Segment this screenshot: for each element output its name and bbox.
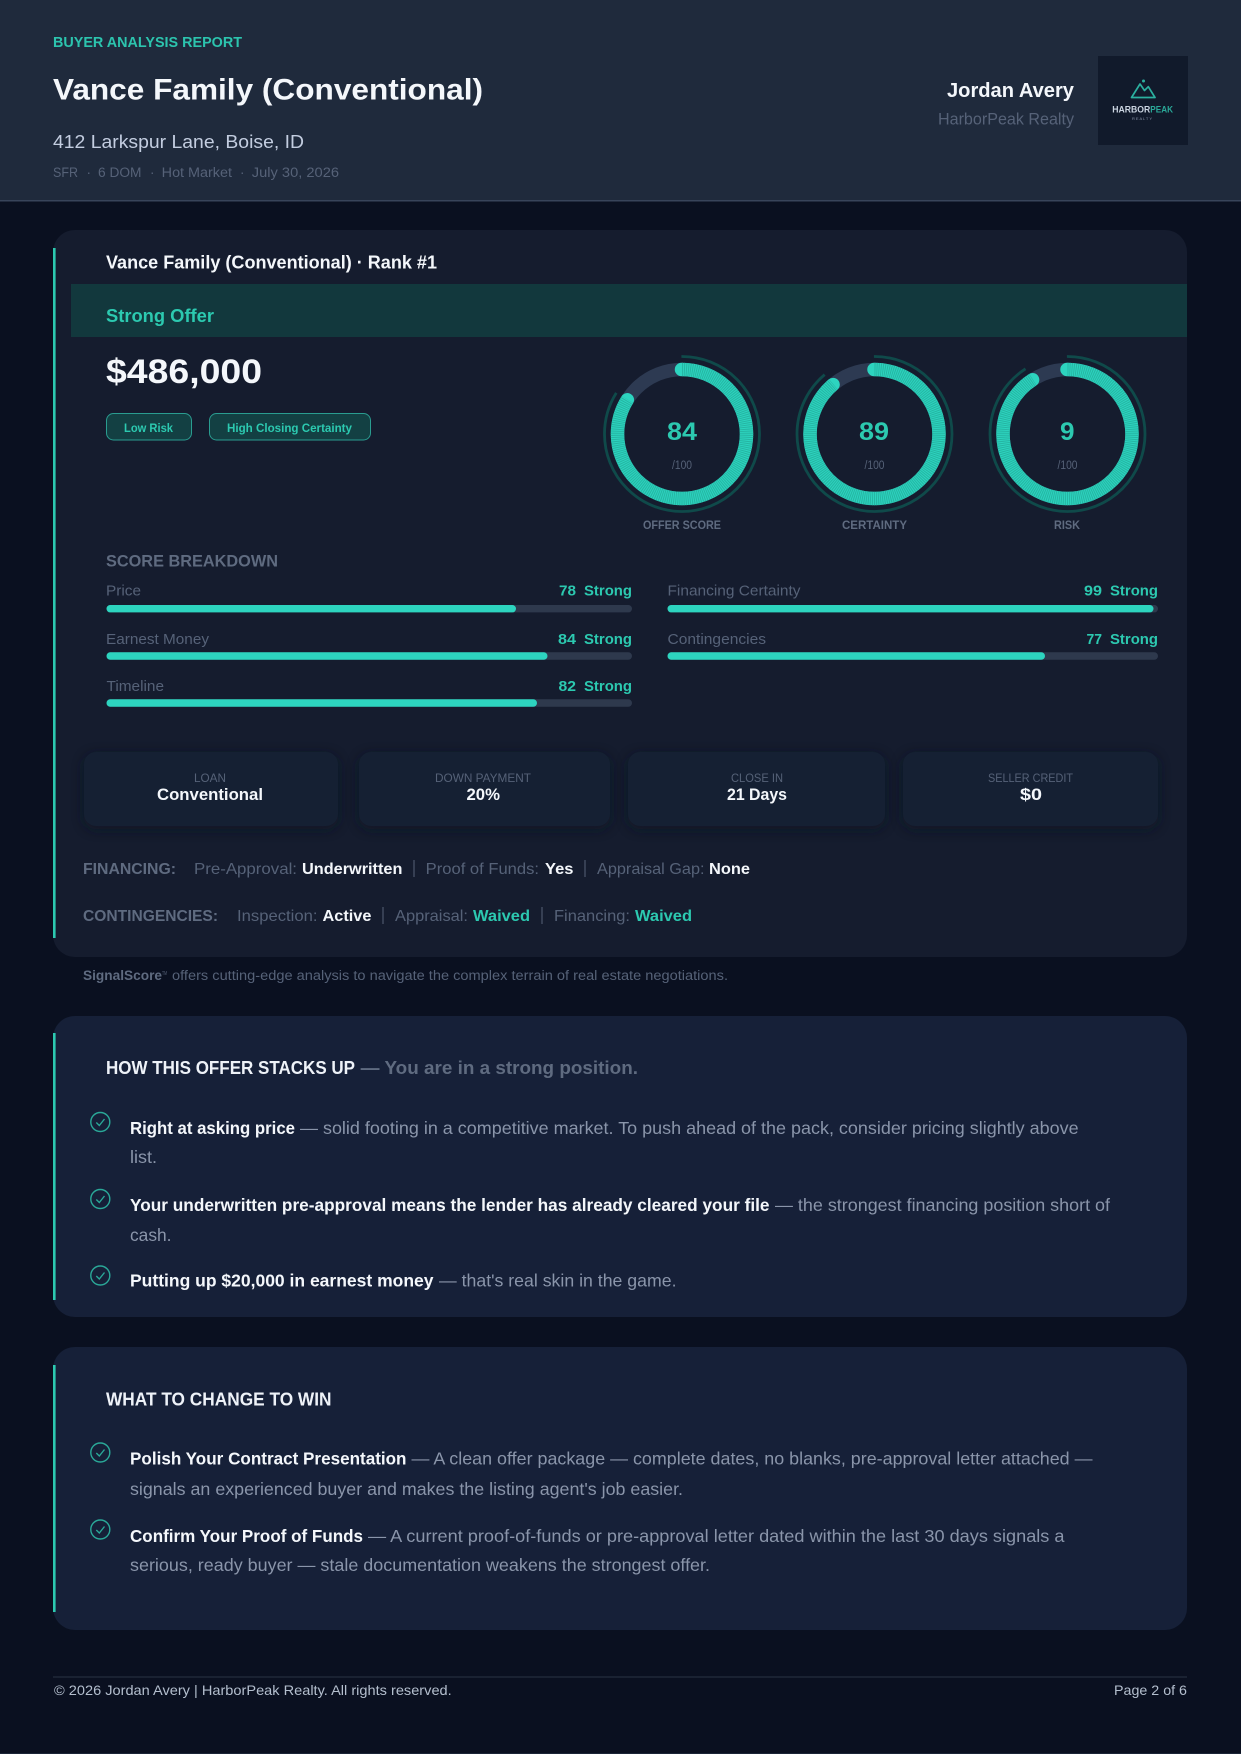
icon: check: [91, 1266, 110, 1285]
point: earnest money: [130, 1270, 676, 1290]
score bar: financing certainty: [668, 584, 1158, 612]
financing line: [83, 860, 750, 878]
recommendation: contract presentation: — A clean offer package — complete dates, no blanks, pre-approval letter attached —: [412, 1448, 1093, 1468]
brokerage name: HarborPeak Realty: [938, 110, 1075, 128]
icon: check: [91, 1443, 110, 1462]
recommendation: contract presentation: Polish Your Contract Presentation: [130, 1448, 406, 1468]
financing line: FINANCING:: [83, 861, 176, 878]
contingencies line: Waived: [473, 908, 530, 925]
point: asking price: Right at asking price: [130, 1118, 295, 1138]
section heading: [106, 1058, 638, 1078]
property meta: [53, 165, 339, 180]
score bar: earnest money: Strong: [584, 632, 632, 648]
stat tile: close in: [628, 752, 885, 829]
section heading: WHAT TO CHANGE TO WIN: [106, 1390, 332, 1410]
contingencies line: Financing:: [554, 908, 630, 925]
score bar: price: Price: [106, 584, 141, 600]
property meta: July 30, 2026: [252, 165, 339, 180]
score bar: timeline: Strong: [584, 679, 632, 695]
badge: high closing certainty: High Closing Certainty: [227, 423, 353, 435]
financing line: Appraisal Gap:: [597, 861, 704, 878]
panel: what to change to win: [53, 1347, 1187, 1630]
financing line: Underwritten: [302, 861, 402, 878]
accent bar: [53, 248, 56, 938]
section heading: — You are in a strong position.: [361, 1058, 638, 1078]
status band: strong offer: Strong Offer: [106, 306, 214, 326]
point: earnest money: Putting up $20,000 in earnest money: [130, 1270, 434, 1290]
stat tile: seller credit: SELLER CREDIT: [988, 771, 1074, 785]
score bar: earnest money: [106, 632, 632, 660]
score bar: timeline: Timeline: [106, 679, 164, 695]
property meta: ·: [150, 165, 154, 180]
point: underwritten pre-approval: [130, 1195, 1110, 1245]
SignalScore disclaimer: TM: [162, 971, 167, 977]
section heading: HOW THIS OFFER STACKS UP: [106, 1058, 355, 1078]
gauge: certainty: /100: [864, 460, 884, 472]
gauge: certainty: CERTAINTY: [842, 520, 907, 532]
score bar: earnest money: 84: [558, 632, 576, 648]
point: underwritten pre-approval: — the strongest financing position short of: [775, 1195, 1110, 1215]
header: [0, 0, 1241, 202]
page number: Page 2 of 6: [1114, 1682, 1187, 1698]
copyright: © 2026 Jordan Avery | HarborPeak Realty. All rights reserved.: [54, 1682, 452, 1698]
point: underwritten pre-approval: cash.: [130, 1225, 172, 1245]
contingencies line: CONTINGENCIES:: [83, 908, 218, 925]
property meta: ·: [240, 165, 244, 180]
score bar: price: [106, 584, 632, 612]
score bar: financing certainty: Financing Certainty: [668, 584, 801, 600]
recommendation: proof of funds: serious, ready buyer — stale documentation weakens the strongest offer.: [130, 1555, 710, 1575]
icon: check: [91, 1112, 110, 1132]
point: asking price: [130, 1118, 1079, 1167]
contingencies line: Waived: [635, 908, 692, 925]
score bar: financing certainty: Strong: [1110, 584, 1158, 600]
score bar: contingencies: Strong: [1110, 632, 1158, 648]
gauge: offer score: [604, 356, 760, 532]
gauge: offer score: /100: [672, 460, 692, 472]
property meta: ·: [86, 165, 91, 180]
stat tile: down payment: 20%: [466, 786, 500, 804]
panel: how this offer stacks up: [53, 1016, 1187, 1317]
contingencies line: Appraisal:: [395, 908, 468, 925]
badge: low risk: Low Risk: [124, 423, 174, 435]
recommendation: proof of funds: [130, 1526, 1065, 1575]
stat tile: close in: CLOSE IN: [731, 771, 783, 785]
icon: check: [91, 1520, 110, 1539]
score breakdown heading: SCORE BREAKDOWN: [106, 552, 278, 571]
footer: [53, 1676, 1187, 1698]
score bar: financing certainty: 99: [1084, 584, 1102, 600]
offer card title: Vance Family (Conventional) · Rank #1: [106, 252, 437, 272]
gauge: risk: /100: [1058, 460, 1078, 472]
stat tile: loan: LOAN: [194, 771, 226, 785]
SignalScore disclaimer: offers cutting-edge analysis to navigate the complex terrain of real estate negotiations.: [172, 968, 728, 983]
SignalScore disclaimer: SignalScore: [83, 968, 162, 983]
contingencies line: Inspection:: [237, 908, 318, 925]
recommendation: proof of funds: — A current proof-of-funds or pre-approval letter dated within the last 30 days signals a: [368, 1526, 1065, 1546]
property meta: Hot Market: [162, 165, 232, 180]
stat tile: seller credit: [903, 752, 1158, 829]
recommendation: contract presentation: signals an experienced buyer and makes the listing agent's job easier.: [130, 1479, 683, 1499]
score bar: price: Strong: [584, 584, 632, 600]
gauge: risk: RISK: [1054, 520, 1081, 532]
financing line: None: [709, 861, 750, 878]
stat tile: loan: [84, 752, 338, 829]
score bar: earnest money: Earnest Money: [106, 632, 210, 648]
contingencies line: [83, 907, 692, 925]
score bar: contingencies: 77: [1086, 632, 1102, 648]
recommendation: contract presentation: [130, 1448, 1093, 1499]
accent bar: [53, 1033, 56, 1300]
point: asking price: — solid footing in a competitive market. To push ahead of the pack, consider pricing slightly above: [300, 1118, 1079, 1138]
score bar: timeline: [106, 679, 632, 707]
offer price: $486,000: [106, 353, 262, 391]
property meta: SFR: [53, 165, 78, 180]
logo: HarborPeak Realty: PEAK: [1150, 105, 1173, 115]
recommendation: proof of funds: Confirm Your Proof of Funds: [130, 1526, 363, 1546]
score bar: contingencies: Contingencies: [668, 632, 766, 648]
stat tile: seller credit: $0: [1020, 786, 1042, 804]
eyebrow: buyer analysis report: BUYER ANALYSIS REPORT: [53, 35, 242, 51]
stat tile: down payment: [359, 752, 610, 829]
gauge: certainty: 89: [859, 418, 889, 446]
financing line: Pre-Approval:: [194, 861, 297, 878]
stat tile: loan: Conventional: [157, 786, 263, 804]
point: earnest money: — that's real skin in the game.: [439, 1270, 676, 1290]
gauge: risk: [990, 356, 1145, 532]
accent bar: [53, 1365, 56, 1612]
status band: strong offer: [71, 284, 1187, 337]
property meta: 6 DOM: [98, 165, 142, 180]
badge: low risk: [106, 414, 192, 440]
financing line: Proof of Funds:: [426, 861, 539, 878]
score bar: contingencies: [668, 632, 1158, 660]
agent name: Jordan Avery: [947, 80, 1075, 102]
stat tile: down payment: DOWN PAYMENT: [435, 771, 532, 785]
panel: offer summary: [53, 230, 1187, 957]
gauge: offer score: 84: [667, 418, 697, 446]
point: underwritten pre-approval: Your underwritten pre-approval means the lender has already cleared your file: [130, 1195, 770, 1215]
contingencies line: Active: [322, 908, 371, 925]
logo: HarborPeak Realty: [1098, 56, 1188, 145]
gauge: certainty: [797, 356, 952, 532]
logo: HarborPeak Realty: REALTY: [1132, 116, 1152, 121]
gauge: risk: 9: [1060, 418, 1074, 446]
point: asking price: list.: [130, 1147, 157, 1167]
gauge: offer score: OFFER SCORE: [643, 520, 721, 532]
title: Vance Family (Conventional): [53, 74, 483, 106]
badge: high closing certainty: [210, 414, 370, 440]
icon: check: [91, 1190, 110, 1208]
logo: HarborPeak Realty: HARBOR: [1112, 105, 1151, 115]
financing line: Yes: [545, 861, 574, 878]
stat tile: close in: 21 Days: [727, 786, 787, 804]
score bar: price: 78: [559, 584, 576, 600]
score bar: timeline: 82: [558, 679, 576, 695]
address: 412 Larkspur Lane, Boise, ID: [53, 131, 304, 152]
